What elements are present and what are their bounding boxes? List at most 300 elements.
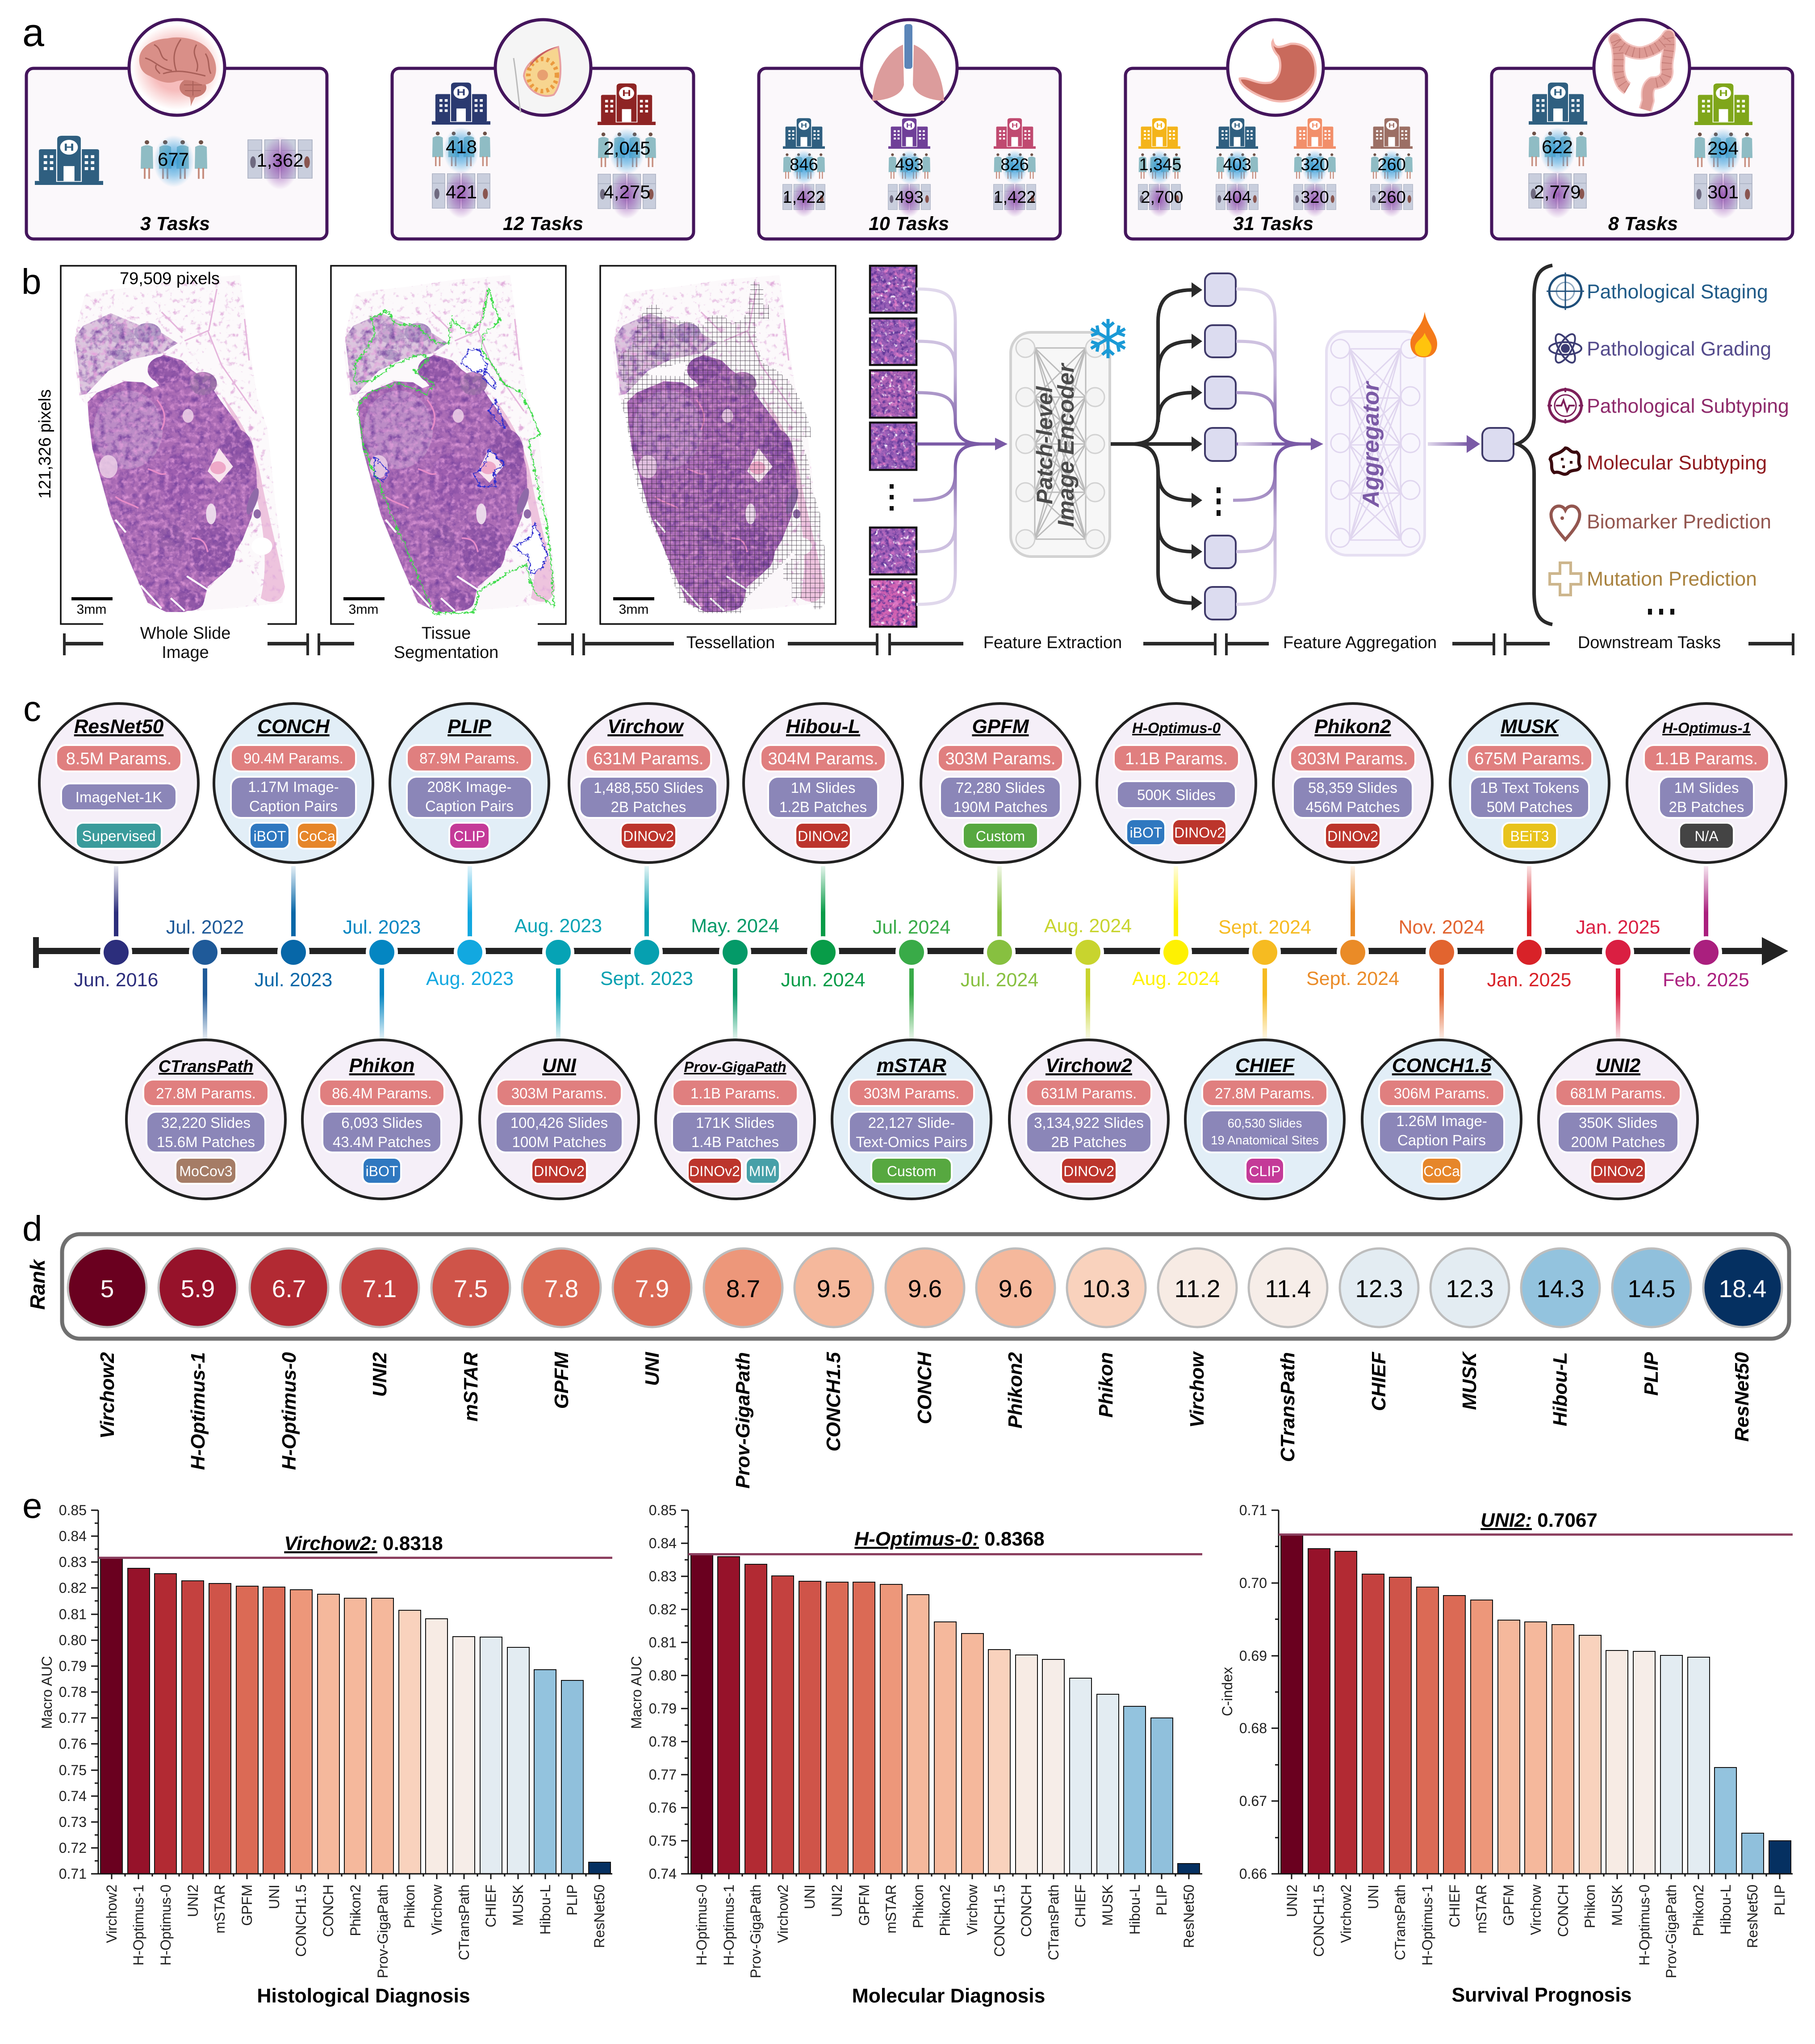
model card: Hibou-L: 1M Slides bbox=[791, 779, 855, 796]
card: lung, 10 tasks bbox=[759, 20, 1060, 239]
icon: slides 301: 301 bbox=[1707, 181, 1739, 202]
model card: Virchow: 1,488,550 Slides bbox=[594, 779, 703, 796]
model card: H-Optimus-1: N/A bbox=[1694, 828, 1719, 844]
model card: Virchow: 2B Patches bbox=[611, 799, 686, 815]
x tick labels: MUSK bbox=[1609, 1885, 1625, 1926]
rank bubbles: 5.9 bbox=[181, 1275, 215, 1303]
model card: MUSK: BEiT3 bbox=[1510, 828, 1549, 844]
task count: 8 Tasks bbox=[1608, 213, 1678, 235]
x tick labels: CHIEF bbox=[1447, 1885, 1463, 1927]
model card: Prov-GigaPath: 171K Slides bbox=[696, 1114, 774, 1131]
hospital column 2 bbox=[1216, 118, 1258, 217]
timeline date labels: Aug. 2024 bbox=[1132, 968, 1220, 989]
y tick labels: 0.80 bbox=[649, 1667, 677, 1684]
rank model labels: Phikon bbox=[1095, 1352, 1117, 1418]
y tick labels: 0.85 bbox=[649, 1502, 677, 1518]
panel letter b: b bbox=[21, 262, 41, 302]
rank model labels: H-Optimus-1 bbox=[187, 1352, 209, 1470]
model card: CONCH: iBOT bbox=[254, 828, 286, 844]
x tick labels: CTransPath bbox=[1392, 1885, 1408, 1960]
icon: snowflake frozen bbox=[1088, 319, 1128, 358]
hospital column 1 bbox=[1138, 118, 1184, 217]
stage label mask: whole slide image bbox=[103, 621, 268, 626]
y tick labels: 0.69 bbox=[1239, 1648, 1267, 1664]
x tick labels: H-Optimus-1 bbox=[130, 1885, 146, 1965]
rank model labels: H-Optimus-0 bbox=[278, 1352, 300, 1470]
y tick labels: 0.77 bbox=[59, 1710, 87, 1726]
model card: Prov-GigaPath: 1.4B Patches bbox=[691, 1134, 779, 1150]
x tick labels: GPFM bbox=[239, 1885, 255, 1926]
stage label mask: tissue segmentation bbox=[354, 621, 538, 626]
panel letter d: d bbox=[22, 1209, 42, 1248]
hospital column 2: 403 bbox=[1223, 155, 1251, 174]
bars bbox=[691, 1554, 1200, 1874]
timeline date labels: Aug. 2023 bbox=[426, 968, 514, 989]
patch ellipsis bbox=[890, 484, 894, 511]
hospital column 4: 260 bbox=[1377, 188, 1406, 207]
task: biomarker prediction: Biomarker Prediction bbox=[1587, 511, 1771, 533]
stage label: tissue segmentation: Tissue bbox=[422, 624, 471, 643]
x tick labels: PLIP bbox=[1772, 1885, 1788, 1915]
model card: Prov-GigaPath: DINOv2 bbox=[689, 1163, 740, 1179]
y tick labels: 0.82 bbox=[59, 1580, 87, 1596]
x tick labels: MUSK bbox=[510, 1885, 526, 1926]
timeline axis with arrow bbox=[33, 937, 1788, 968]
hospital column 3: 320 bbox=[1301, 155, 1329, 174]
y tick labels: 0.81 bbox=[59, 1606, 87, 1622]
rank axis label: Rank bbox=[26, 1258, 49, 1310]
patch-level image encoder: Image Encoder bbox=[1053, 362, 1079, 527]
x tick labels: Prov-GigaPath bbox=[375, 1885, 391, 1978]
task count: 3 Tasks bbox=[140, 213, 210, 235]
icon: hospital green bbox=[1694, 83, 1752, 125]
card: stomach, 31 tasks bbox=[1125, 20, 1426, 239]
hospital column 3 bbox=[993, 118, 1036, 217]
model card: CONCH1.5: 306M Params. bbox=[1394, 1085, 1489, 1102]
rank model labels: CHIEF bbox=[1368, 1352, 1390, 1411]
rank model labels: Hibou-L bbox=[1549, 1352, 1571, 1426]
chart: survival prognosis bbox=[1219, 1502, 1793, 2006]
icon: slides 2,779: 2,779 bbox=[1534, 181, 1581, 202]
x tick labels: CTransPath bbox=[456, 1885, 472, 1960]
y axis title: Macro AUC bbox=[628, 1656, 644, 1729]
rank model labels: MUSK bbox=[1459, 1351, 1480, 1410]
y tick labels: 0.83 bbox=[649, 1568, 677, 1584]
timeline connectors bbox=[0, 866, 1815, 1039]
stage label text: whole slide image: Image bbox=[162, 643, 209, 662]
y tick labels: 0.78 bbox=[649, 1734, 677, 1750]
icon: patients with count: 677 bbox=[158, 149, 189, 170]
model card: CONCH1.5: 1.26M Image- bbox=[1396, 1113, 1487, 1129]
x tick labels: Prov-GigaPath bbox=[748, 1885, 764, 1978]
x tick labels: Virchow bbox=[964, 1884, 980, 1935]
more tasks ellipsis bbox=[1648, 609, 1674, 615]
model card: UNI: DINOv2 bbox=[534, 1163, 585, 1179]
model card: CONCH1.5 bbox=[1362, 1040, 1521, 1199]
rank model labels: ResNet50 bbox=[1731, 1352, 1753, 1442]
rank bubbles: 7.9 bbox=[635, 1275, 669, 1303]
rank bubbles: 12.3 bbox=[1355, 1275, 1403, 1303]
best-value title: UNI2: 0.7067 bbox=[1480, 1509, 1598, 1531]
y tick labels: 0.75 bbox=[59, 1762, 87, 1778]
hospital column 3: 1,422 bbox=[993, 188, 1036, 207]
hospital column 3: 320 bbox=[1301, 188, 1329, 207]
card: breast, 12 tasks bbox=[392, 20, 694, 239]
timeline date labels: Feb. 2025 bbox=[1663, 969, 1749, 991]
x tick labels bbox=[104, 1884, 607, 1978]
icon: patients 622: 622 bbox=[1542, 136, 1573, 157]
patch thumbnails bbox=[870, 266, 916, 627]
model card: UNI2: UNI2 bbox=[1596, 1055, 1641, 1076]
panel d: average rank bbox=[22, 1209, 1789, 1489]
x tick labels: ResNet50 bbox=[1744, 1885, 1761, 1948]
hospital column 1: 1,345 bbox=[1139, 155, 1182, 174]
rank model labels: CTransPath bbox=[1277, 1352, 1299, 1462]
model card: GPFM: 72,280 Slides bbox=[956, 779, 1045, 796]
model card: Prov-GigaPath: 1.1B Params. bbox=[690, 1085, 780, 1102]
x tick labels: Virchow bbox=[1528, 1884, 1544, 1935]
rank model labels: CONCH bbox=[914, 1352, 936, 1424]
bars bbox=[1281, 1534, 1791, 1874]
y tick labels: 0.71 bbox=[1239, 1502, 1267, 1518]
best-value title: Virchow2: 0.8318 bbox=[284, 1533, 443, 1554]
rank bubbles: 8.7 bbox=[726, 1275, 760, 1303]
rank bubbles: 7.5 bbox=[454, 1275, 488, 1303]
organ badge: breast bbox=[495, 20, 591, 115]
y tick labels: 0.74 bbox=[59, 1788, 87, 1804]
timeline date labels: Nov. 2024 bbox=[1399, 917, 1485, 938]
model card: Phikon: Phikon bbox=[349, 1055, 414, 1076]
icon: slides 4,275 bbox=[598, 171, 656, 219]
aggregator: Aggregator bbox=[1358, 381, 1384, 508]
task: pathological grading bbox=[1549, 331, 1771, 365]
panel letter a: a bbox=[22, 10, 44, 54]
panel b: processing pipeline bbox=[21, 262, 1793, 662]
timeline date labels: Jul. 2023 bbox=[343, 917, 421, 938]
hospital column 4: 260 bbox=[1377, 155, 1406, 174]
icon: patients 294 bbox=[1694, 128, 1752, 175]
rank bubbles: 12.3 bbox=[1446, 1275, 1494, 1303]
icon: slides with count bbox=[248, 136, 312, 190]
rank model labels: UNI bbox=[641, 1352, 663, 1386]
x tick labels: H-Optimus-1 bbox=[1419, 1885, 1435, 1965]
y tick labels: 0.81 bbox=[649, 1634, 677, 1650]
model card: UNI2: 200M Patches bbox=[1571, 1134, 1665, 1150]
chart: histological diagnosis bbox=[39, 1502, 612, 2007]
chart title: Molecular Diagnosis bbox=[852, 1985, 1045, 2007]
model card: Virchow2 bbox=[1009, 1040, 1168, 1199]
x tick labels: mSTAR bbox=[1473, 1885, 1489, 1934]
x tick labels bbox=[694, 1884, 1197, 1978]
rank bubbles: 14.5 bbox=[1627, 1275, 1676, 1303]
model card: Virchow2: 3,134,922 Slides bbox=[1034, 1114, 1144, 1131]
hospital column 1: 846 bbox=[790, 155, 818, 174]
model card: H-Optimus-1: 1.1B Params. bbox=[1655, 750, 1758, 768]
arrows: features to aggregator bbox=[1233, 289, 1323, 604]
y tick labels: 0.67 bbox=[1239, 1793, 1267, 1809]
x tick labels: CONCH bbox=[1018, 1885, 1034, 1937]
axes and ticks bbox=[1271, 1510, 1793, 1879]
model card: Virchow bbox=[569, 704, 728, 863]
patch-level image encoder bbox=[1011, 332, 1110, 557]
y tick labels: 0.76 bbox=[59, 1736, 87, 1752]
task: biomarker prediction bbox=[1551, 506, 1771, 540]
timeline date labels: Aug. 2024 bbox=[1044, 915, 1132, 937]
rank bubbles: 14.3 bbox=[1536, 1275, 1585, 1303]
hospital column 3: 826 bbox=[1000, 155, 1029, 174]
task: mutation prediction bbox=[1550, 563, 1757, 595]
y tick labels bbox=[649, 1502, 677, 1882]
model card: CHIEF: 19 Anatomical Sites bbox=[1211, 1133, 1319, 1147]
x tick labels: CHIEF bbox=[483, 1885, 499, 1927]
x tick labels: CONCH bbox=[320, 1885, 336, 1937]
model card: H-Optimus-1 bbox=[1627, 704, 1786, 863]
model card: Phikon2: 58,359 Slides bbox=[1308, 779, 1397, 796]
icon: patients with count bbox=[141, 135, 207, 187]
task: pathological staging: Pathological Staging bbox=[1587, 281, 1768, 303]
icon: slides 421 bbox=[432, 171, 490, 218]
y tick labels: 0.77 bbox=[649, 1767, 677, 1783]
rank model labels: GPFM bbox=[551, 1352, 573, 1409]
x tick labels: Hibou-L bbox=[1718, 1885, 1734, 1935]
model card: PLIP: Caption Pairs bbox=[425, 798, 514, 814]
model card: Phikon: 43.4M Patches bbox=[333, 1134, 431, 1150]
rank model labels: mSTAR bbox=[460, 1352, 482, 1422]
x tick labels: Virchow2 bbox=[1338, 1885, 1354, 1943]
model card: CTransPath: 15.6M Patches bbox=[157, 1134, 255, 1150]
panel c: model timeline bbox=[0, 689, 1815, 1199]
y tick labels: 0.78 bbox=[59, 1684, 87, 1700]
axes and ticks bbox=[91, 1510, 612, 1879]
rank bubbles: 5 bbox=[100, 1275, 114, 1303]
y tick labels bbox=[1239, 1502, 1267, 1882]
icon: patients 418 bbox=[432, 127, 490, 174]
model card: mSTAR: mSTAR bbox=[877, 1055, 946, 1076]
y tick labels: 0.82 bbox=[649, 1601, 677, 1617]
timeline date labels: Jul. 2023 bbox=[255, 969, 332, 991]
y tick labels: 0.72 bbox=[59, 1840, 87, 1856]
model card: Phikon2: DINOv2 bbox=[1327, 828, 1378, 844]
model card: H-Optimus-1: H-Optimus-1 bbox=[1662, 720, 1751, 736]
bars bbox=[100, 1558, 611, 1874]
icon: hospital bbox=[35, 135, 103, 185]
x tick labels: H-Optimus-0 bbox=[1636, 1885, 1652, 1965]
organ badge: stomach bbox=[1228, 20, 1323, 115]
patch-level image encoder: Patch-level bbox=[1032, 386, 1057, 504]
x tick labels: ResNet50 bbox=[1181, 1885, 1197, 1948]
stage label: tissue segmentation: Segmentation bbox=[394, 643, 498, 662]
y tick labels: 0.74 bbox=[649, 1866, 677, 1882]
y tick labels bbox=[59, 1502, 87, 1882]
y axis title: C-index bbox=[1219, 1667, 1235, 1716]
stage label: downstream tasks: Downstream Tasks bbox=[1578, 633, 1721, 652]
model card: CONCH bbox=[214, 704, 373, 863]
hospital column 1: 2,700 bbox=[1141, 188, 1184, 207]
task: molecular subtyping bbox=[1550, 448, 1767, 474]
aggregator bbox=[1326, 331, 1425, 555]
rank bubbles: 6.7 bbox=[272, 1275, 306, 1303]
panel e: performance bar charts bbox=[22, 1486, 1793, 2007]
y tick labels: 0.80 bbox=[59, 1632, 87, 1648]
icon: slides 421: 421 bbox=[446, 181, 477, 202]
model card: MUSK: 1B Text Tokens bbox=[1480, 779, 1579, 796]
x tick labels: CONCH1.5 bbox=[1311, 1885, 1327, 1957]
card: brain, 3 tasks bbox=[26, 20, 327, 239]
x tick labels: Phikon2 bbox=[1690, 1885, 1706, 1936]
model card: Phikon2: 456M Patches bbox=[1306, 799, 1400, 815]
model card: PLIP: 87.9M Params. bbox=[419, 750, 519, 766]
model card: UNI2: DINOv2 bbox=[1593, 1163, 1644, 1179]
icon: patients 418: 418 bbox=[446, 136, 477, 157]
y tick labels: 0.76 bbox=[649, 1800, 677, 1816]
model card: PLIP bbox=[390, 704, 549, 863]
model card: H-Optimus-0 bbox=[1097, 704, 1256, 863]
rank bubbles: 11.2 bbox=[1175, 1275, 1220, 1303]
model card: mSTAR: Custom bbox=[887, 1163, 936, 1179]
task count: 12 Tasks bbox=[503, 213, 583, 235]
model card: CONCH: 90.4M Params. bbox=[243, 750, 343, 766]
chart title: Histological Diagnosis bbox=[257, 1985, 470, 2007]
chart title: Survival Prognosis bbox=[1451, 1984, 1632, 2006]
arrows: encoder to features bbox=[1111, 282, 1202, 611]
x tick labels: Phikon bbox=[910, 1885, 926, 1928]
x tick labels: Prov-GigaPath bbox=[1663, 1885, 1679, 1978]
timeline date labels: Sept. 2024 bbox=[1218, 917, 1311, 938]
timeline date labels: Jul. 2022 bbox=[166, 917, 244, 938]
model card: ResNet50: Supervised bbox=[82, 828, 156, 844]
y tick labels: 0.73 bbox=[59, 1814, 87, 1830]
model card: Virchow: Virchow bbox=[607, 716, 685, 737]
task count: 10 Tasks bbox=[869, 213, 949, 235]
x tick labels: ResNet50 bbox=[591, 1885, 607, 1948]
model card: Phikon bbox=[302, 1040, 461, 1199]
x tick labels: Phikon bbox=[401, 1885, 418, 1928]
model card: Phikon: 86.4M Params. bbox=[332, 1085, 432, 1102]
hospital column 2 bbox=[888, 118, 930, 217]
x tick labels: GPFM bbox=[856, 1885, 872, 1926]
x tick labels: GPFM bbox=[1501, 1885, 1517, 1926]
rank bubbles: 9.6 bbox=[908, 1275, 942, 1303]
model card: Phikon: 6,093 Slides bbox=[341, 1114, 422, 1131]
model card: Phikon2 bbox=[1273, 704, 1432, 863]
x tick labels: Virchow bbox=[429, 1884, 445, 1935]
chart: molecular diagnosis bbox=[628, 1502, 1202, 2007]
model card: CONCH1.5: Caption Pairs bbox=[1397, 1132, 1486, 1148]
x tick labels: H-Optimus-1 bbox=[721, 1885, 737, 1965]
model card: Prov-GigaPath: MIM bbox=[749, 1163, 777, 1179]
best-value title: H-Optimus-0: 0.8368 bbox=[854, 1528, 1045, 1550]
timeline date labels bbox=[74, 915, 1749, 991]
model card: Hibou-L: Hibou-L bbox=[786, 716, 860, 737]
y tick labels: 0.71 bbox=[59, 1866, 87, 1882]
model card: UNI: UNI bbox=[542, 1055, 577, 1076]
y tick labels: 0.79 bbox=[59, 1658, 87, 1674]
hospital column 2: 493 bbox=[895, 155, 924, 174]
x tick labels: Phikon bbox=[1582, 1885, 1598, 1928]
icon: slides with count: 1,362 bbox=[256, 150, 304, 171]
arrows: patches to encoder bbox=[913, 289, 1008, 604]
model card: Virchow2: DINOv2 bbox=[1063, 1163, 1114, 1179]
model card: Hibou-L bbox=[744, 704, 903, 863]
timeline date labels: Jul. 2024 bbox=[961, 969, 1038, 991]
organ badge: brain bbox=[129, 20, 225, 115]
model card: Phikon2: Phikon2 bbox=[1314, 716, 1391, 737]
model card: Hibou-L: 304M Params. bbox=[768, 750, 878, 768]
model card: Virchow2: 631M Params. bbox=[1041, 1085, 1137, 1102]
model card: H-Optimus-0: 1.1B Params. bbox=[1125, 750, 1228, 768]
timeline date labels: Jan. 2025 bbox=[1576, 917, 1660, 938]
model card: GPFM: 190M Patches bbox=[954, 799, 1047, 815]
model card: mSTAR bbox=[832, 1040, 991, 1199]
x tick labels: UNI2 bbox=[185, 1885, 201, 1917]
model card: CTransPath bbox=[126, 1040, 285, 1199]
rank bubbles: 7.8 bbox=[544, 1275, 578, 1303]
y tick labels: 0.75 bbox=[649, 1833, 677, 1849]
stage label: tessellation: Tessellation bbox=[686, 633, 775, 652]
x tick labels: UNI bbox=[1365, 1885, 1381, 1909]
model card: UNI: 100M Patches bbox=[512, 1134, 606, 1150]
model card: Hibou-L: DINOv2 bbox=[798, 828, 849, 844]
organ badge: lungs bbox=[861, 20, 957, 115]
rank model labels: Prov-GigaPath bbox=[732, 1352, 754, 1489]
rank model labels: Phikon2 bbox=[1004, 1352, 1026, 1428]
timeline date labels: Sept. 2024 bbox=[1306, 968, 1399, 989]
rank frame bbox=[62, 1234, 1789, 1339]
model card: CONCH: 1.17M Image- bbox=[248, 779, 339, 795]
model card: PLIP: PLIP bbox=[447, 716, 492, 737]
hospital column 1: 1,422 bbox=[782, 188, 825, 207]
icon: slides 4,275: 4,275 bbox=[603, 181, 651, 202]
task: mutation prediction: Mutation Prediction bbox=[1587, 568, 1757, 590]
x tick labels: Virchow2 bbox=[775, 1885, 791, 1943]
model card: mSTAR: 22,127 Slide- bbox=[868, 1114, 955, 1131]
tessellation frame bbox=[600, 266, 836, 624]
x tick labels: Hibou-L bbox=[537, 1885, 553, 1935]
whole slide image frame: 3mm bbox=[77, 602, 106, 617]
task: pathological grading: Pathological Grading bbox=[1587, 338, 1771, 360]
rank bubbles: 10.3 bbox=[1082, 1275, 1130, 1303]
model card: mSTAR: 303M Params. bbox=[864, 1085, 959, 1102]
x tick labels: mSTAR bbox=[883, 1885, 899, 1934]
model card: H-Optimus-0: DINOv2 bbox=[1174, 825, 1225, 841]
y axis title: Macro AUC bbox=[39, 1656, 55, 1729]
arrow: aggregator to slide feature bbox=[1428, 435, 1480, 453]
model card: UNI: 303M Params. bbox=[511, 1085, 607, 1102]
x tick labels: Phikon2 bbox=[937, 1885, 953, 1936]
icon: patients 294: 294 bbox=[1707, 138, 1739, 159]
rank bubbles: 18.4 bbox=[1719, 1275, 1767, 1303]
x tick labels: CONCH bbox=[1555, 1885, 1571, 1937]
model card: H-Optimus-0: iBOT bbox=[1130, 825, 1162, 841]
timeline date labels: Jan. 2025 bbox=[1487, 969, 1571, 991]
x tick labels: UNI bbox=[802, 1885, 818, 1909]
x tick labels: H-Optimus-0 bbox=[158, 1885, 174, 1965]
feature ellipsis bbox=[1217, 487, 1221, 516]
timeline date labels: Jun. 2016 bbox=[74, 969, 158, 991]
model card: CHIEF: CHIEF bbox=[1235, 1055, 1295, 1076]
y tick labels: 0.83 bbox=[59, 1554, 87, 1570]
model card: UNI2: 350K Slides bbox=[1579, 1114, 1657, 1131]
x tick labels: CONCH1.5 bbox=[991, 1885, 1008, 1957]
model card: ResNet50: ImageNet-1K bbox=[75, 789, 162, 805]
x tick labels: UNI bbox=[266, 1885, 282, 1909]
tissue segmentation frame: 3mm bbox=[349, 602, 378, 617]
model card: GPFM bbox=[921, 704, 1080, 863]
tessellation frame: 3mm bbox=[619, 602, 648, 617]
model card: Virchow: 631M Params. bbox=[593, 750, 704, 768]
y tick labels: 0.70 bbox=[1239, 1575, 1267, 1591]
slide-level feature token bbox=[1482, 428, 1514, 461]
